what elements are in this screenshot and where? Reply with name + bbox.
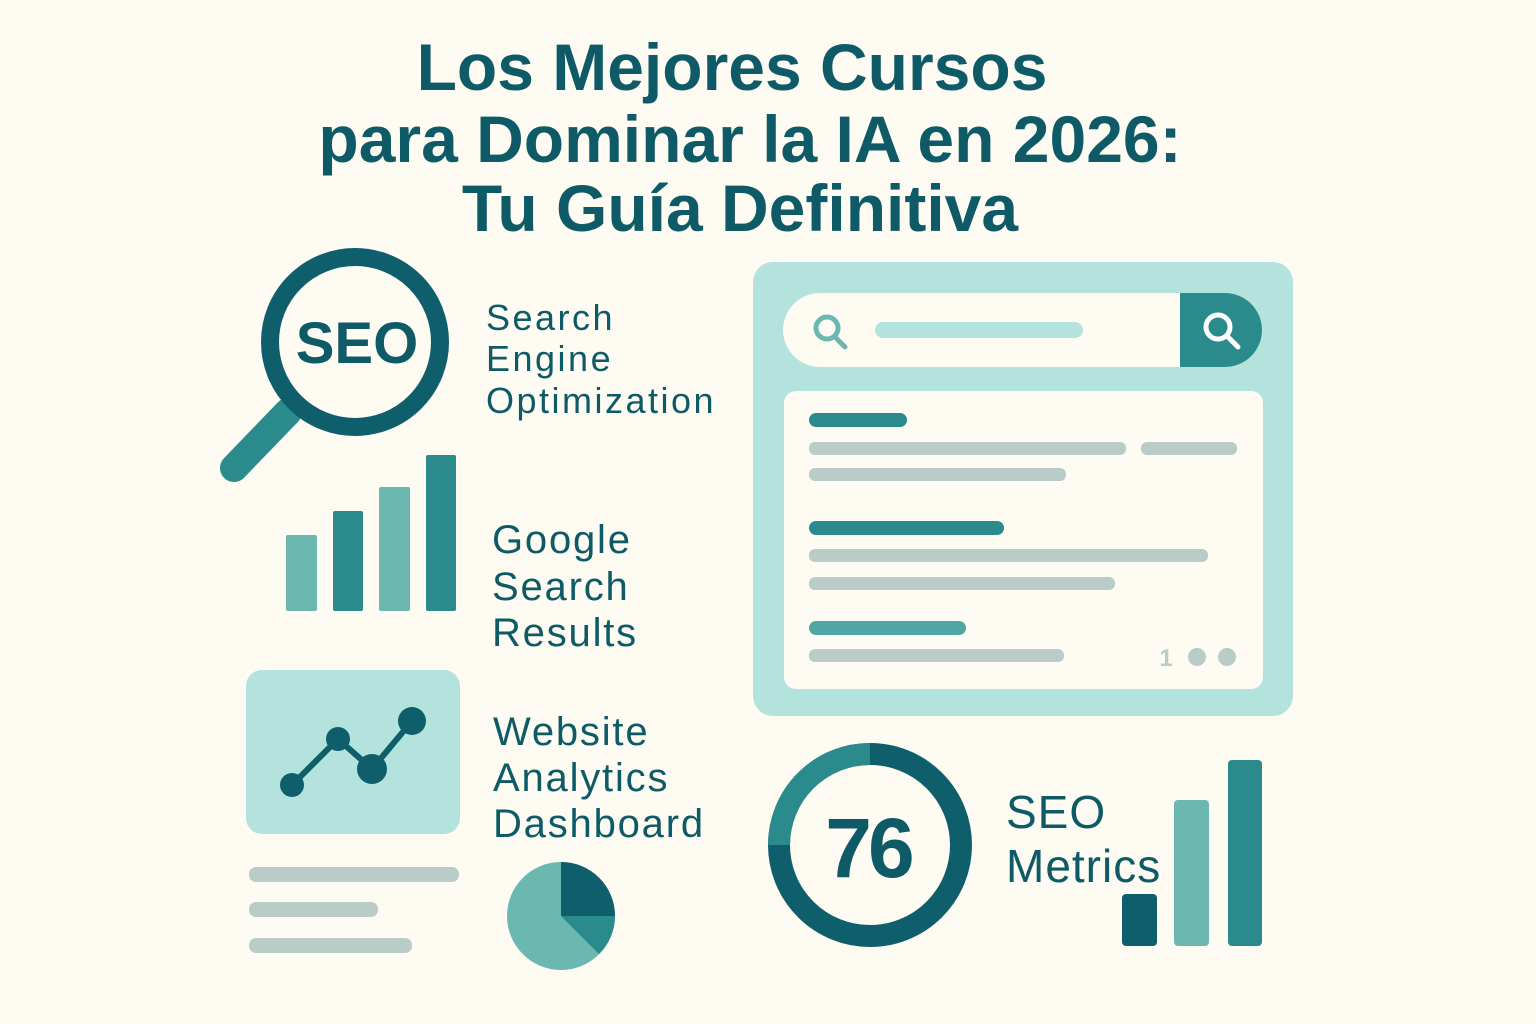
text: Website Analytics Dashboard: Website: [493, 710, 649, 754]
icon: SEO magnifier: SEO: [296, 311, 418, 376]
results card: [784, 391, 1263, 689]
panel: search results browser: [753, 262, 1293, 716]
title: Tu Guía Definitiva: [462, 171, 1019, 245]
text: Search Engine Optimization: Engine: [486, 338, 613, 379]
gauge: score 76: [779, 754, 961, 936]
text: Search Engine Optimization: [486, 297, 716, 421]
text: Google Search Results: [492, 518, 638, 655]
title: Los Mejores Cursos: [417, 30, 1047, 104]
text: Google Search Results: Results: [492, 611, 638, 655]
title: [318, 30, 1182, 245]
text: SEO Metrics: [1006, 786, 1161, 892]
text: Search Engine Optimization: Search: [486, 297, 615, 338]
title: para Dominar la IA en 2026:: [318, 102, 1182, 176]
pie chart: [507, 862, 615, 970]
text: Website Analytics Dashboard: Dashboard: [493, 802, 705, 846]
text: Search Engine Optimization: Optimization: [486, 380, 716, 421]
text lines placeholder: [249, 867, 459, 953]
gauge: score 76: 76: [825, 801, 912, 895]
text: SEO Metrics: Metrics: [1006, 840, 1161, 892]
text: Google Search Results: Search: [492, 565, 630, 609]
text: Website Analytics Dashboard: [493, 710, 705, 846]
search bar: [783, 293, 1262, 367]
bar chart: metrics: [1122, 760, 1262, 946]
text: Website Analytics Dashboard: Analytics: [493, 756, 669, 800]
bar chart: growth: [286, 455, 456, 611]
results card: 1: [1159, 645, 1173, 672]
text: Google Search Results: Google: [492, 518, 632, 562]
text: SEO Metrics: SEO: [1006, 786, 1106, 838]
panel: analytics line chart: [246, 670, 460, 834]
icon: SEO magnifier: [234, 257, 440, 468]
